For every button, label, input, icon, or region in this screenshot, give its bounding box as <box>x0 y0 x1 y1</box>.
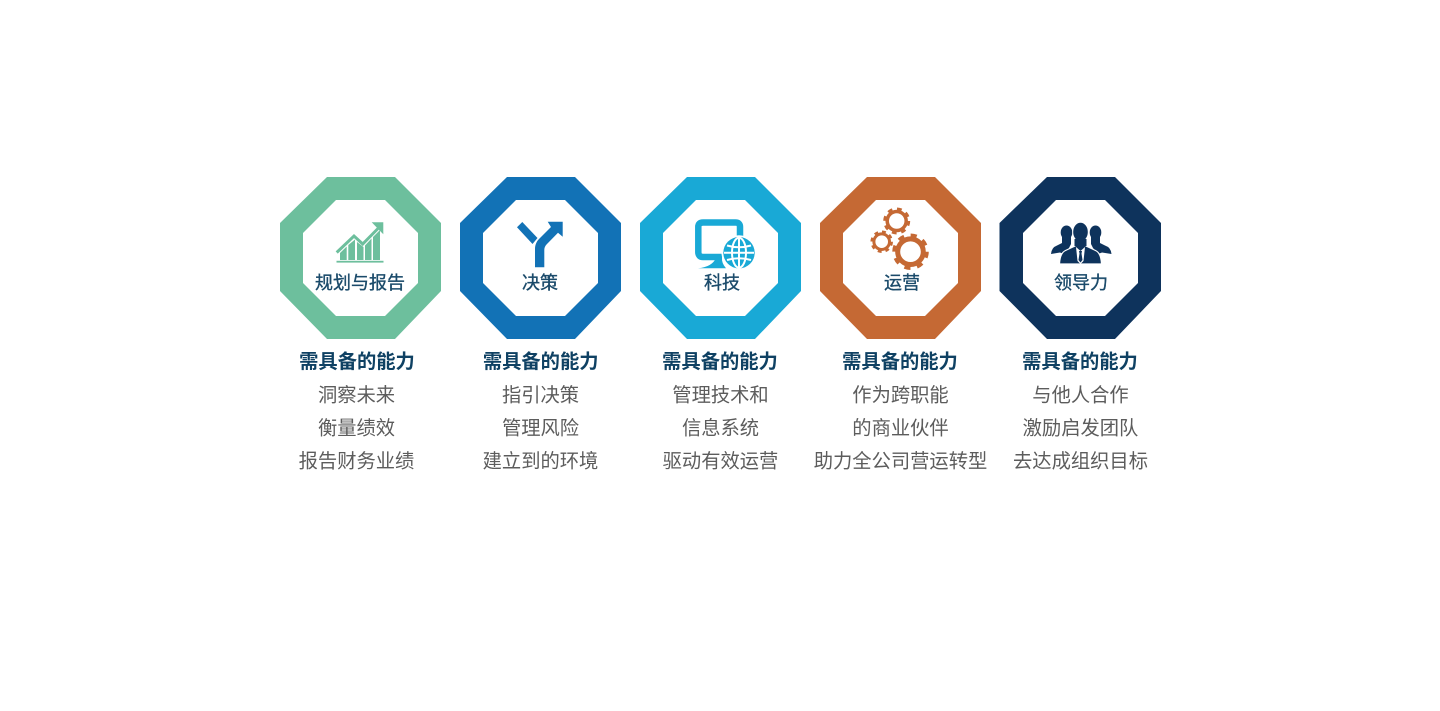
capability text: 管理技术和 <box>672 384 769 406</box>
panel: technology <box>640 177 801 472</box>
icon label: 科技 <box>704 273 740 293</box>
capability text <box>662 351 778 472</box>
capability text: 需具备的能力 <box>483 351 599 373</box>
octagon badge: orange <box>820 177 981 339</box>
capability text: 报告财务业绩 <box>299 450 414 472</box>
capability text: 激励启发团队 <box>1023 418 1138 440</box>
octagon badge: navy <box>1000 177 1161 339</box>
capability text: 作为跨职能 <box>852 384 949 406</box>
capability text: 驱动有效运营 <box>663 450 778 472</box>
capability text: 助力全公司营运转型 <box>814 450 987 472</box>
panel: planning and reporting <box>280 177 441 472</box>
icon: rising bar chart <box>336 222 384 263</box>
capability text: 信息系统 <box>682 418 759 440</box>
capability text: 管理风险 <box>502 418 579 440</box>
icon label: 决策 <box>522 273 558 293</box>
capability text <box>299 351 415 472</box>
capability text <box>814 351 987 472</box>
icon label: 领导力 <box>1054 273 1108 293</box>
capability text: 需具备的能力 <box>299 351 415 373</box>
capability text: 洞察未来 <box>318 384 395 406</box>
capability text: 需具备的能力 <box>1022 351 1138 373</box>
octagon badge: cyan <box>640 177 801 339</box>
panel: leadership <box>1000 177 1161 472</box>
capability text: 衡量绩效 <box>318 418 395 440</box>
capability text: 需具备的能力 <box>662 351 778 373</box>
icon label: 规划与报告 <box>315 273 405 293</box>
capability text: 与他人合作 <box>1032 384 1129 406</box>
capability text <box>1013 351 1148 472</box>
panel: operations <box>814 177 987 472</box>
icon: business team <box>1051 222 1112 264</box>
capability text: 的商业伙伴 <box>852 418 949 440</box>
panel: decision <box>460 177 621 472</box>
octagon badge: green <box>280 177 441 339</box>
capability text: 去达成组织目标 <box>1013 450 1148 472</box>
icon: three gears <box>872 210 926 268</box>
icon label: 运营 <box>884 273 920 293</box>
icon: forking arrow <box>517 222 563 267</box>
octagon badge: blue <box>460 177 621 339</box>
capability text <box>483 351 599 472</box>
capability text: 指引决策 <box>502 384 579 406</box>
capability text: 需具备的能力 <box>842 351 958 373</box>
capability text: 建立到的环境 <box>483 450 598 472</box>
icon: monitor with globe <box>698 222 756 270</box>
